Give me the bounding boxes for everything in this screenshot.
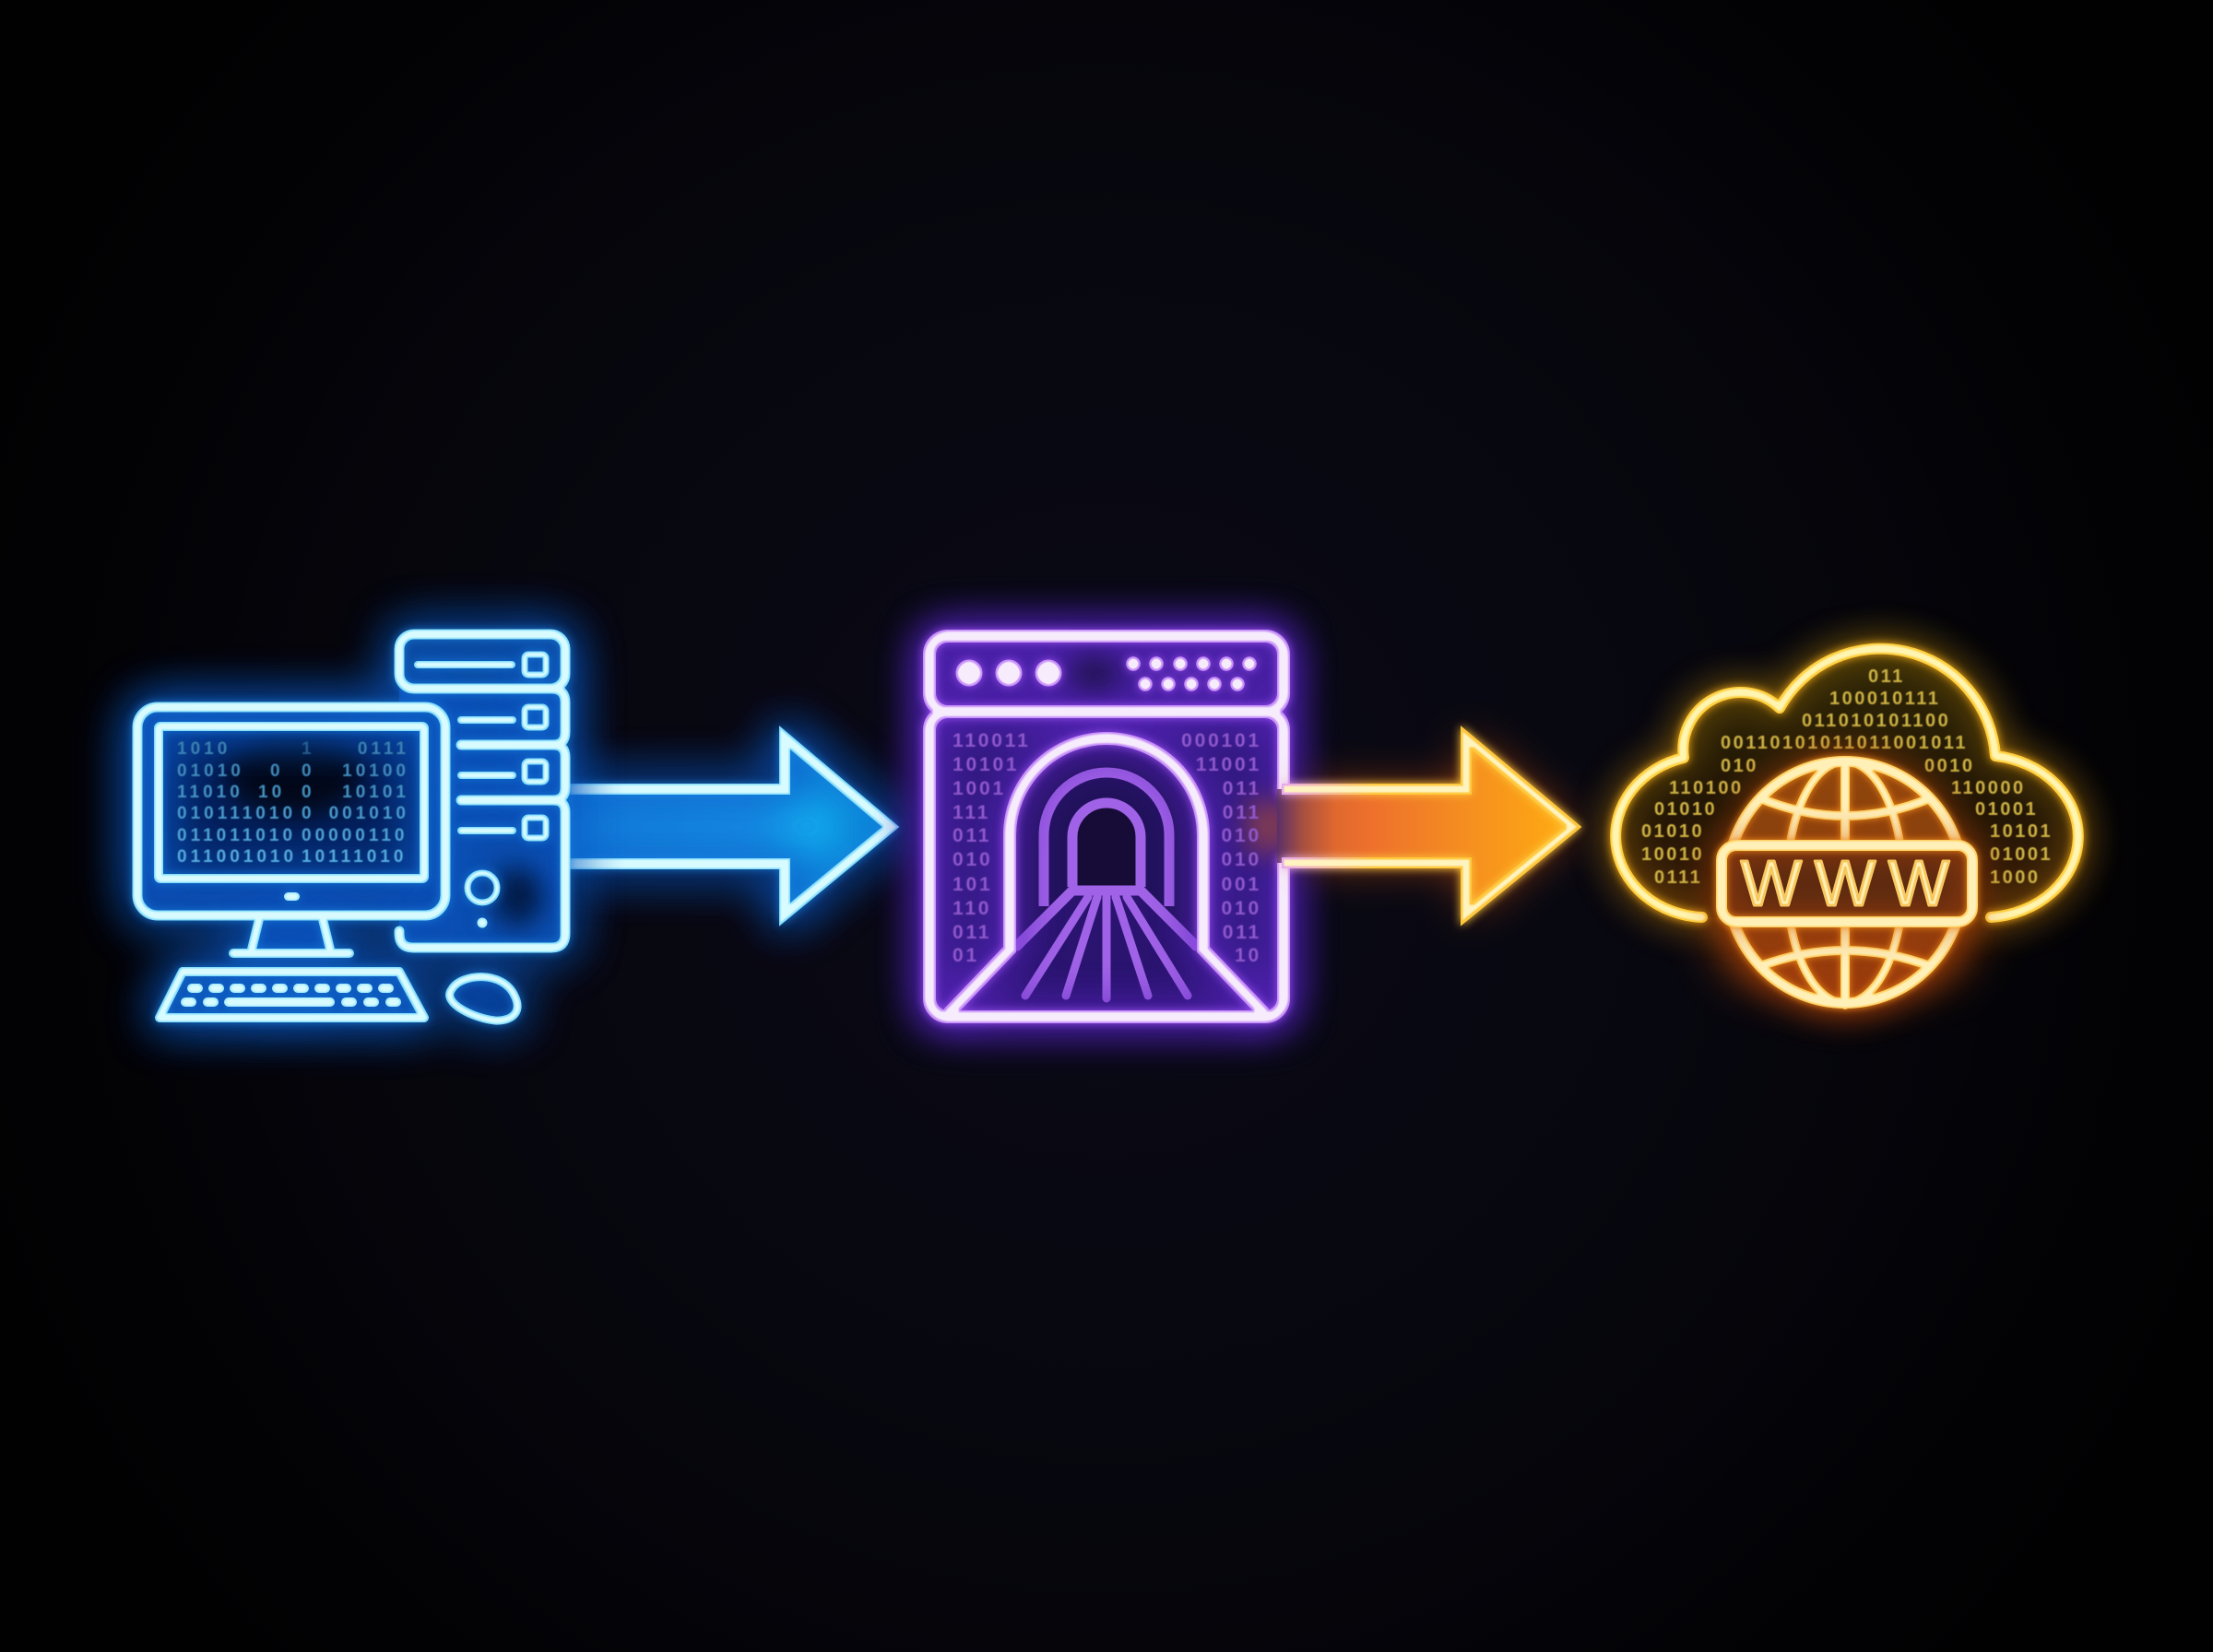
binary right of tunnel: 011 (1223, 802, 1261, 823)
binary right of tunnel: 011 (1223, 778, 1261, 799)
binary on monitor screen: 0 (302, 783, 315, 802)
binary on monitor screen: 10101 (342, 783, 409, 802)
arrow halo (1309, 738, 1573, 914)
small indicator dots (1127, 658, 1256, 690)
binary inside cloud (1641, 667, 2053, 888)
binary inside cloud: 00110101011011001011 (1721, 733, 1968, 753)
binary inside cloud: 110100 (1669, 778, 1744, 798)
large indicator dots (957, 661, 1060, 685)
binary inside cloud: 010 (1721, 756, 1758, 776)
binary inside cloud: 011 (1868, 667, 1905, 687)
power knob (467, 873, 497, 903)
binary left of tunnel (953, 730, 1031, 966)
mouse (450, 977, 517, 1021)
binary inside cloud: 0111 (1654, 867, 1702, 888)
monitor button (284, 892, 300, 901)
binary inside cloud: 011010101100 (1802, 711, 1950, 731)
binary right of tunnel: 000101 (1181, 730, 1261, 751)
binary inside cloud: 10010 (1641, 844, 1704, 865)
binary on monitor screen: 1010 (177, 739, 231, 759)
gateway fills (929, 636, 1293, 1017)
binary on monitor screen: 010111010 (177, 804, 296, 823)
binary inside cloud: 01010 (1641, 821, 1704, 842)
monitor frame (137, 707, 445, 915)
binary right of tunnel: 11001 (1196, 754, 1261, 775)
binary inside cloud: 0010 (1924, 756, 1975, 776)
binary left of tunnel: 011 (953, 922, 991, 943)
binary right of tunnel: 10 (1235, 945, 1261, 966)
power led (478, 918, 487, 927)
binary on monitor screen: 0 (302, 804, 315, 823)
computer neon outlines (137, 634, 565, 1021)
www banner outline (1722, 845, 1972, 922)
binary inside cloud: 10101 (1990, 821, 2053, 842)
gateway purple halo (917, 625, 1296, 1029)
binary left of tunnel: 010 (953, 849, 992, 870)
binary right of tunnel: 011 (1223, 922, 1261, 943)
cloud halo (1615, 649, 2078, 1009)
cloud fill (1615, 649, 2078, 917)
binary on monitor screen: 11010 (177, 783, 243, 802)
top panel (929, 636, 1284, 712)
binary inside cloud: 100010111 (1829, 689, 1940, 709)
binary on monitor screen: 10100 (342, 761, 409, 781)
computer dark fills (137, 634, 565, 1021)
tower lower units (399, 689, 565, 948)
icon: cloud and www globe (1615, 649, 2078, 1009)
tower top unit (399, 634, 565, 689)
binary left of tunnel: 011 (953, 825, 991, 846)
drive slots (418, 665, 513, 831)
binary inside cloud: 110000 (1951, 778, 2026, 798)
body (929, 712, 1284, 1017)
binary left of tunnel: 110 (953, 898, 991, 919)
keyboard keys (181, 984, 401, 1007)
binary on monitor screen (177, 739, 409, 867)
binary right of tunnel: 001 (1222, 874, 1261, 895)
binary left of tunnel: 101 (953, 874, 992, 895)
monitor stand (233, 919, 349, 953)
tunnel arch (950, 738, 1263, 1012)
icon: tunnel gateway (917, 625, 1296, 1029)
binary left of tunnel: 1001 (953, 778, 1006, 799)
www label: WWW (1741, 847, 1962, 919)
keyboard outline (160, 972, 424, 1018)
binary left of tunnel: 110011 (953, 730, 1031, 751)
arrow: tunnel to web (1277, 738, 1573, 914)
binary on monitor screen: 0 (302, 761, 315, 781)
binary on monitor screen: 001010 (329, 804, 409, 823)
globe fill (1727, 761, 1963, 1003)
binary on monitor screen: 0 (270, 761, 284, 781)
tunnel inner purple arches and floor rays (1017, 773, 1196, 998)
globe lines (1727, 761, 1963, 1005)
binary on monitor screen: 1 (302, 739, 315, 759)
cloud outline (1615, 649, 2078, 917)
binary right of tunnel (1181, 730, 1261, 966)
binary inside cloud: 01010 (1654, 799, 1717, 820)
www banner fill (1722, 845, 1972, 922)
monitor screen (159, 726, 424, 879)
binary right of tunnel: 010 (1222, 849, 1261, 870)
binary inside cloud: 01001 (1975, 799, 2038, 820)
icon: desktop computer with tower (137, 634, 891, 1021)
binary on monitor screen: 011001010 (177, 847, 297, 867)
arrow body (1277, 738, 1573, 914)
arrow: computer to tunnel (562, 738, 891, 914)
binary on monitor screen: 011011010 (177, 826, 296, 845)
gateway neon outlines (929, 636, 1284, 1017)
binary left of tunnel: 01 (953, 945, 979, 966)
binary on monitor screen: 10 (258, 783, 285, 802)
binary left of tunnel: 10101 (953, 754, 1019, 775)
binary on monitor screen: 00000110 (302, 826, 408, 845)
binary left of tunnel: 111 (953, 802, 990, 823)
binary on monitor screen: 01010 (177, 761, 244, 781)
binary right of tunnel: 010 (1222, 898, 1261, 919)
arrow outline (1282, 738, 1573, 914)
binary on monitor screen: 0111 (358, 739, 409, 759)
drive buttons (525, 655, 546, 838)
binary on monitor screen: 10111010 (302, 847, 407, 867)
binary right of tunnel: 010 (1222, 825, 1261, 846)
binary inside cloud: 01001 (1990, 844, 2053, 865)
binary inside cloud: 1000 (1990, 867, 2040, 888)
